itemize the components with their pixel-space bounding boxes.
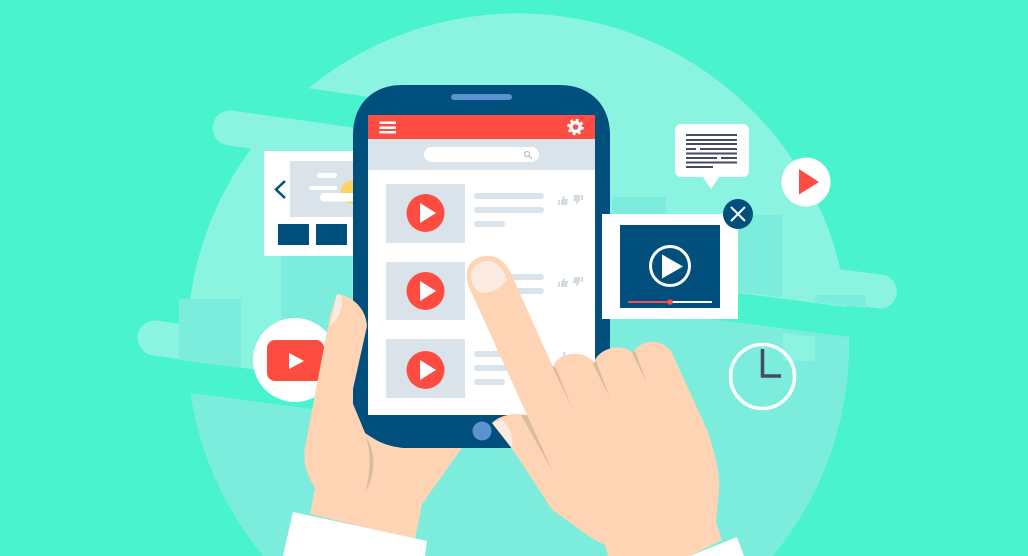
left thumb xyxy=(310,294,373,493)
finger creases xyxy=(521,351,647,472)
thumb nail xyxy=(330,294,342,326)
home button xyxy=(472,422,492,440)
right hand xyxy=(467,256,722,556)
video row 1 xyxy=(386,184,583,243)
palm crease xyxy=(365,436,373,493)
clock xyxy=(730,344,794,408)
speech bubble xyxy=(675,124,749,189)
left hand palm xyxy=(304,294,462,540)
play badge xyxy=(782,158,830,206)
right video card xyxy=(602,214,738,319)
app header xyxy=(368,115,595,139)
right shirt cuff xyxy=(690,537,744,556)
left webpage card xyxy=(264,151,364,256)
screen xyxy=(368,115,595,415)
phone xyxy=(353,85,610,448)
index fingernail xyxy=(471,261,507,293)
youtube badge xyxy=(253,318,337,402)
left shirt cuff xyxy=(283,512,427,556)
background circle with bands xyxy=(138,13,897,556)
close button xyxy=(723,199,753,229)
search bar xyxy=(368,139,595,170)
speaker xyxy=(451,94,512,100)
thumb nail xyxy=(492,420,512,448)
video row 2 xyxy=(386,262,583,320)
video row 3 xyxy=(386,339,566,398)
